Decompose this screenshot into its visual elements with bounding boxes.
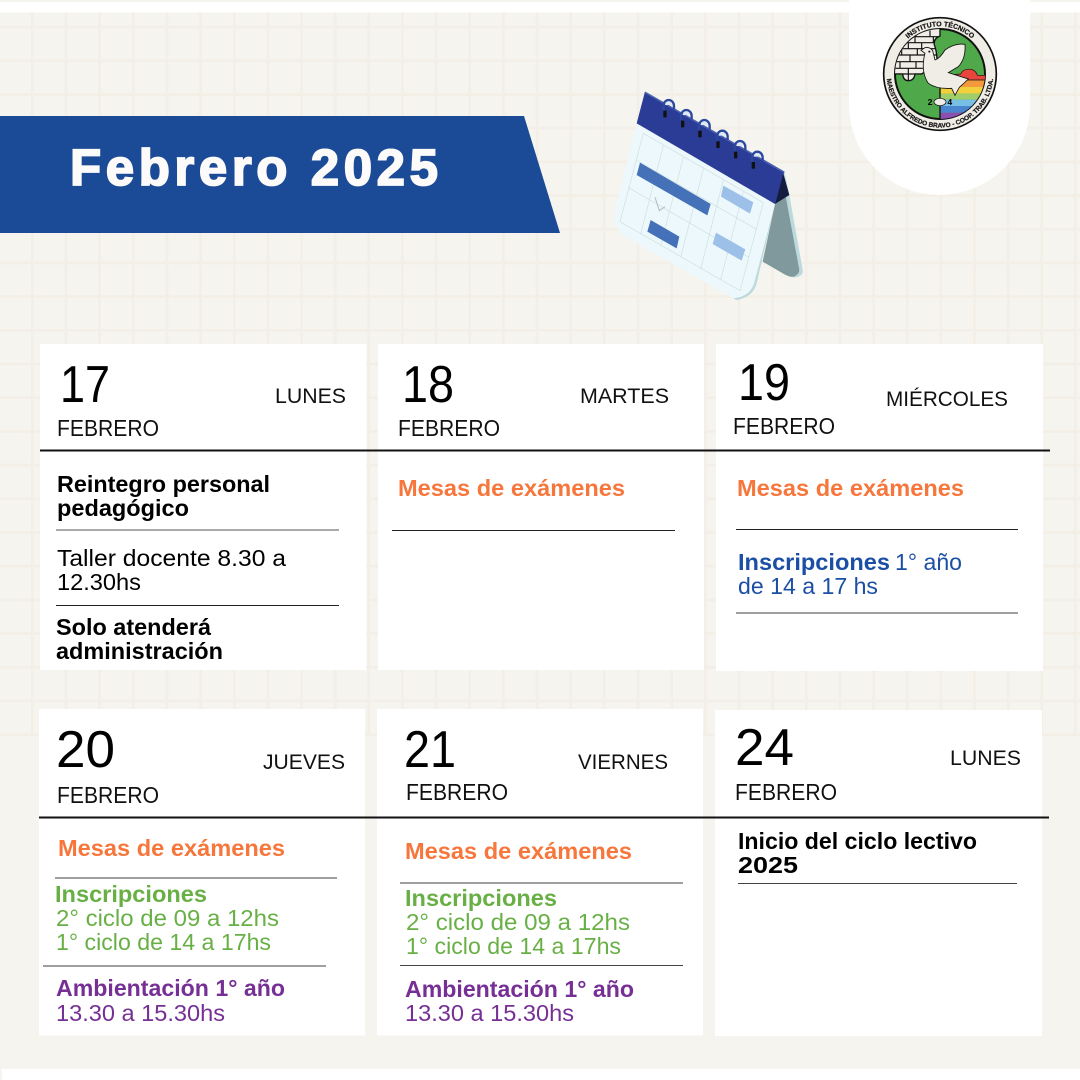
event: inscripciones: 1° ciclo de 14 a 17hs	[56, 929, 271, 955]
event: inscripciones: 2° ciclo de 09 a 12hs	[406, 909, 630, 935]
weekday: MIÉRCOLES	[886, 386, 1008, 411]
event: ambientacion: 13.30 a 15.30hs	[56, 1000, 225, 1026]
date 20: 20	[56, 721, 115, 779]
panel: miercoles 19	[716, 344, 1043, 671]
event: inicio del ciclo lectivo: Inicio del ciclo lectivo	[738, 828, 977, 854]
event: administracion	[56, 614, 223, 664]
event: inscripciones	[738, 549, 962, 599]
weekday: LUNES	[275, 384, 346, 408]
date 24: 24	[735, 719, 794, 777]
event: taller: 12.30hs	[57, 569, 141, 595]
panel: lunes 24	[715, 710, 1042, 1036]
logo: Instituto Técnico seal	[882, 16, 998, 132]
logo panel	[849, 0, 1030, 195]
event: administracion: Solo atenderá	[56, 614, 212, 640]
event: inscripciones: 1° año	[895, 549, 962, 575]
event: reintegro: Reintegro personal	[57, 471, 270, 497]
event: taller	[57, 545, 287, 595]
weekday: LUNES	[950, 746, 1021, 770]
date 17: 17	[60, 356, 110, 414]
event: mesas: Mesas de exámenes	[58, 835, 285, 861]
event: taller: Taller docente 8.30 a	[57, 545, 287, 571]
date 19: 19	[738, 354, 790, 412]
event: inicio del ciclo lectivo	[738, 828, 977, 878]
event: mesas: Mesas de exámenes	[405, 838, 632, 864]
event: mesas: Mesas de exámenes	[737, 475, 964, 501]
event: ambientacion	[56, 975, 285, 1026]
event: reintegro	[57, 471, 270, 521]
event: inscripciones: Inscripciones	[405, 885, 557, 911]
event: ambientacion: 13.30 a 15.30hs	[405, 1000, 574, 1026]
weekday: VIERNES	[578, 750, 668, 774]
panel: jueves 20	[39, 709, 365, 1036]
month: FEBRERO	[57, 782, 159, 808]
icon: desk calendar	[614, 92, 803, 300]
month: FEBRERO	[57, 415, 159, 441]
month: FEBRERO	[406, 779, 508, 805]
logo: Instituto Técnico seal: 4	[947, 97, 952, 107]
month: FEBRERO	[398, 415, 500, 441]
event: inscripciones	[405, 885, 630, 959]
weekday: JUEVES	[263, 750, 345, 774]
event: inscripciones	[55, 881, 279, 955]
logo: Instituto Técnico seal: 2	[928, 97, 933, 107]
title: Febrero 2025	[70, 139, 438, 196]
event: ambientacion	[405, 976, 634, 1026]
event: inicio del ciclo lectivo: 2025	[738, 852, 798, 878]
event: inscripciones: Inscripciones	[55, 881, 207, 907]
event: ambientacion: Ambientación 1° año	[56, 975, 285, 1001]
event: inscripciones: 2° ciclo de 09 a 12hs	[56, 905, 279, 931]
date 18: 18	[402, 356, 454, 414]
event: administracion: administración	[56, 638, 223, 664]
event: mesas: Mesas de exámenes	[398, 475, 625, 501]
event: reintegro: pedagógico	[57, 495, 189, 521]
event: ambientacion: Ambientación 1° año	[405, 976, 634, 1002]
logo: Instituto Técnico seal: INSTITUTO TÉCNICO	[905, 21, 974, 39]
event: inscripciones: de 14 a 17 hs	[738, 573, 878, 599]
panel: lunes 17	[40, 344, 366, 670]
event: inscripciones: Inscripciones	[738, 549, 890, 575]
date 21: 21	[404, 721, 456, 779]
month: FEBRERO	[735, 779, 837, 805]
title banner	[0, 116, 560, 233]
logo: Instituto Técnico seal: MAESTRO ALFREDO BRAVO - COOP. TRAB. LTDA.	[886, 78, 994, 128]
month: FEBRERO	[733, 413, 835, 439]
panel: viernes 21	[377, 709, 703, 1036]
event: inscripciones: 1° ciclo de 14 a 17hs	[406, 933, 621, 959]
weekday: MARTES	[580, 384, 669, 408]
panel: martes 18	[378, 344, 704, 670]
